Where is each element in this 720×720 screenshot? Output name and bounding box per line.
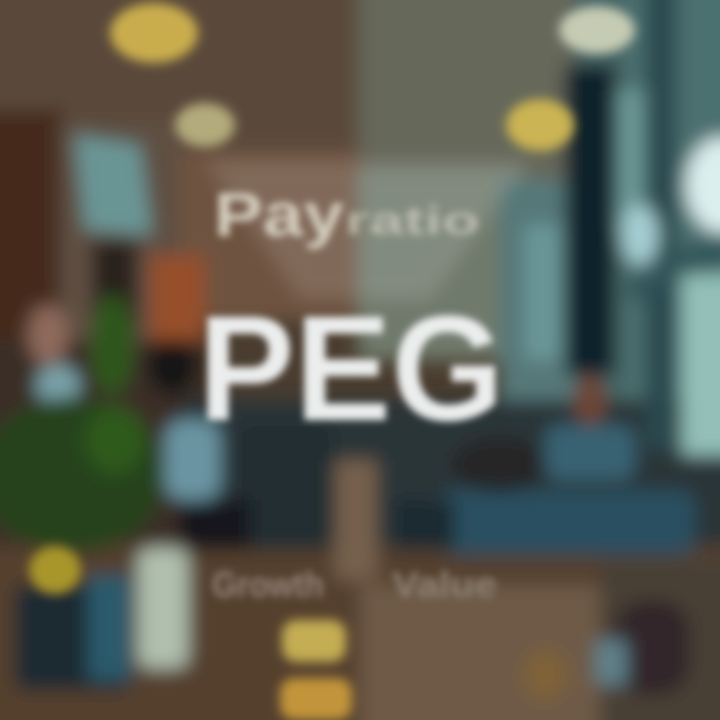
table and pot items [15, 585, 130, 690]
column and window frames [565, 65, 615, 375]
lower band and floor [0, 340, 210, 560]
top line text: Pay [214, 181, 345, 250]
plant pot highlight [29, 546, 81, 594]
plant foliage [0, 397, 164, 553]
bottom caption: Growth [212, 564, 324, 605]
headline panel: Value [392, 564, 497, 605]
headline panel [198, 160, 530, 605]
table lamps [282, 620, 346, 662]
main word PEG: PEG [198, 284, 504, 452]
walls [0, 0, 360, 240]
sofa and people [440, 490, 695, 555]
headline panel: ratio [345, 199, 480, 243]
